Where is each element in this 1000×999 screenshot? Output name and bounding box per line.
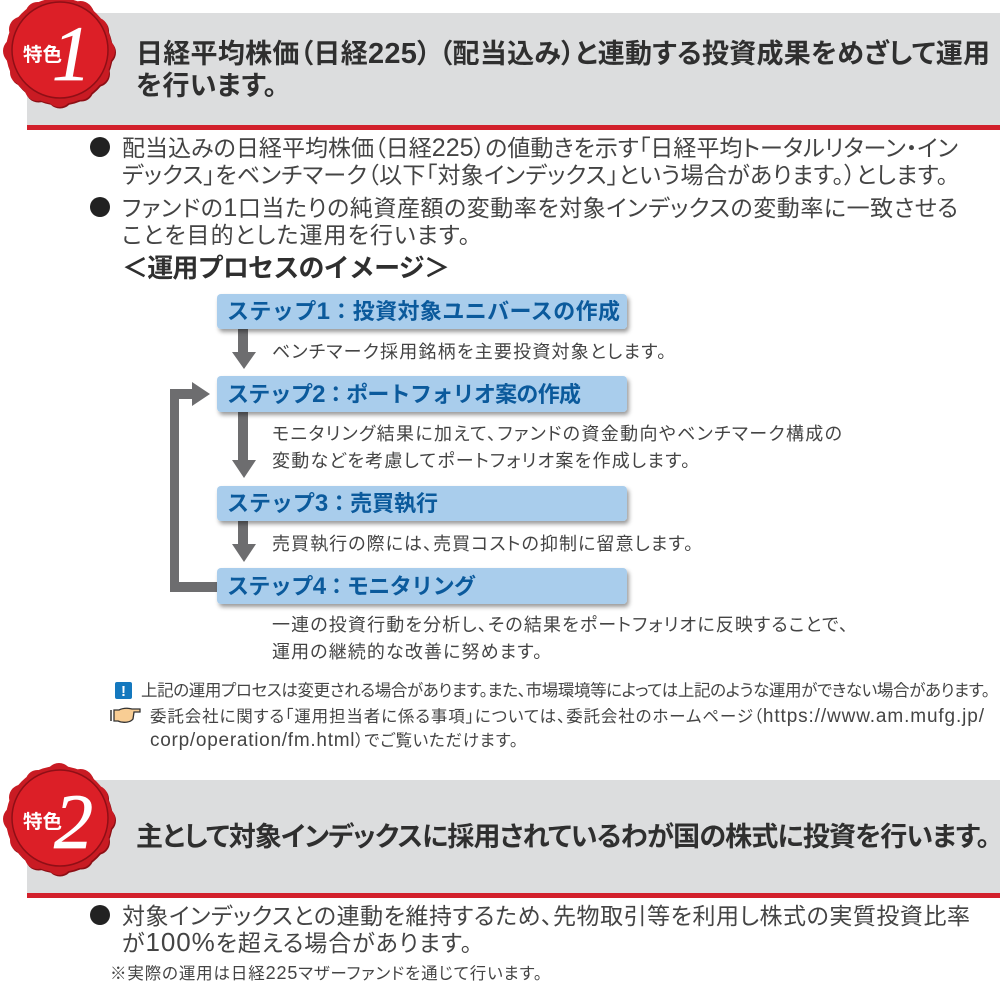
heading: feature 2: 主として対象インデックスに採用されているわが国の株式に投資を行います。 (136, 821, 990, 852)
seal badge: feature 1 (3, 0, 116, 108)
seal badge: feature 2: 特色 (23, 811, 62, 833)
heading: feature 1: を行います。 (136, 71, 277, 101)
icon: exclamation: ! (121, 683, 126, 700)
step 2 box: ステップ2：ポートフォリオ案の作成 (227, 381, 581, 408)
step 2 description (272, 424, 842, 471)
step 4 description (272, 615, 848, 662)
note: fund manager information: 委託会社に関する「運用担当者に係る事項」については、委託会社のホームページ（https://www.am.mufg.jp/ (150, 706, 985, 727)
step 4 box (217, 568, 627, 604)
icon: exclamation (115, 682, 132, 700)
step 4 description: 運用の継続的な改善に努めます。 (272, 642, 542, 662)
text block: feature 1 bullets: デックス」をベンチマーク（以下「対象インデックス」という場合があります。）とします。 (122, 162, 948, 188)
step 2 description: 変動などを考慮してポートフォリオ案を作成します。 (272, 451, 690, 471)
text block: feature 2 bullet: 対象インデックスとの連動を維持するため、先物取引等を利用し株式の実質投資比率 (122, 903, 970, 929)
note: fund manager information: corp/operation/fm.html）でご覧いただけます。 (150, 730, 518, 751)
step 3 box (217, 486, 627, 521)
note: fund manager information (150, 706, 985, 751)
seal badge: feature 2: 2 (54, 778, 93, 865)
step 3 description: 売買執行の際には、売買コストの抑制に留意します。 (272, 534, 693, 554)
step 3 box: ステップ3：売買執行 (227, 490, 438, 517)
seal badge: feature 1: 1 (52, 10, 91, 97)
step 1 description: ベンチマーク採用銘柄を主要投資対象とします。 (272, 342, 666, 362)
heading: feature 1 (136, 38, 990, 101)
text block: feature 2 bullet (90, 903, 970, 957)
step 2 box (217, 376, 627, 412)
text block: feature 1 bullets (90, 134, 958, 248)
step 1 box: ステップ1：投資対象ユニバースの作成 (227, 298, 620, 325)
footnote: ※実際の運用は日経225マザーファンドを通じて行います。 (110, 963, 542, 983)
arrow: loop from step 4 back to step 2 (170, 382, 217, 592)
arrow: step 2 to step 3 (232, 412, 256, 478)
header band: feature 2 (27, 780, 1000, 898)
header band: feature 1 (27, 13, 1000, 130)
text block: feature 2 bullet: が100%を超える場合があります。 (122, 927, 472, 957)
heading: process image: ＜運用プロセスのイメージ＞ (122, 253, 450, 283)
seal badge: feature 2 (3, 763, 116, 876)
arrow: step 1 to step 2 (232, 329, 256, 369)
step 4 box: ステップ4：モニタリング (227, 573, 476, 600)
text block: feature 1 bullets: ファンドの1口当たりの純資産額の変動率を対象インデックスの変動率に一致させる (122, 194, 958, 222)
step 4 description: 一連の投資行動を分析し、その結果をポートフォリオに反映することで、 (272, 615, 848, 635)
text block: feature 1 bullets: ことを目的とした運用を行います。 (122, 222, 470, 248)
note: process may change: 上記の運用プロセスは変更される場合があります。また、市場環境等によっては上記のような運用ができない場合があります。 (141, 681, 990, 700)
step 2 description: モニタリング結果に加えて、ファンドの資金動向やベンチマーク構成の (272, 424, 842, 444)
icon: pointing hand (111, 708, 140, 722)
text block: feature 1 bullets: 配当込みの日経平均株価（日経225）の値動きを示す「日経平均トータルリターン・イン (122, 134, 958, 162)
heading: feature 1: 日経平均株価（日経225） （配当込み）と連動する投資成果をめざして運用 (136, 38, 990, 70)
arrow: step 3 to step 4 (232, 521, 256, 562)
seal badge: feature 1: 特色 (23, 44, 62, 66)
